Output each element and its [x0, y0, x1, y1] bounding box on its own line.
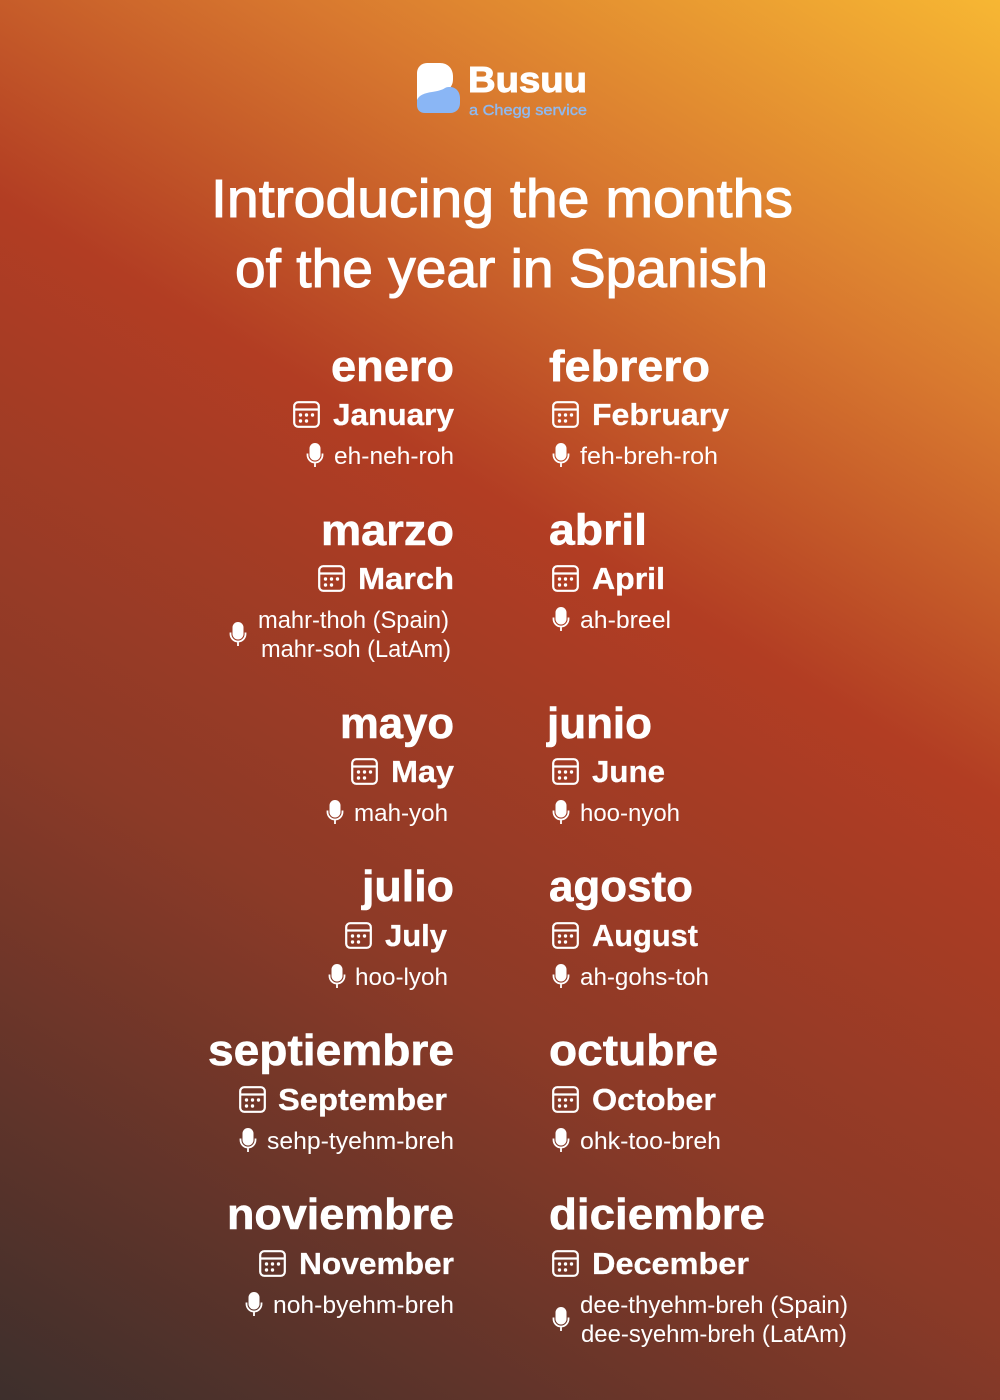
month: abril: [549, 506, 671, 634]
month: septiembre: [208, 1026, 454, 1155]
title: of the year in Spanish: [235, 239, 768, 299]
month: mayo: mayo: [340, 699, 454, 748]
month: febrero: February: [592, 397, 730, 432]
month: junio: junio: [546, 699, 652, 748]
month: noviembre: [227, 1190, 454, 1319]
month: febrero: feh-breh-roh: [580, 443, 718, 470]
month: enero: January: [333, 397, 455, 432]
month: enero: [294, 342, 455, 470]
logo wordmark: Busuu: [468, 59, 587, 100]
month: mayo: mah-yoh: [354, 800, 448, 827]
month: mayo: May: [391, 754, 455, 789]
month: mayo: [328, 699, 455, 827]
month: diciembre: December: [592, 1246, 749, 1281]
title: Introducing the months: [211, 169, 793, 229]
month: agosto: August: [592, 918, 698, 953]
month: agosto: ah-gohs-toh: [580, 964, 709, 991]
month: octubre: octubre: [549, 1026, 718, 1075]
month: septiembre: septiembre: [208, 1026, 454, 1075]
month: octubre: October: [592, 1082, 716, 1117]
month: enero: eh-neh-roh: [334, 443, 454, 470]
month: julio: hoo-lyoh: [355, 964, 448, 991]
month: marzo: March: [358, 561, 454, 596]
month: diciembre: dee-thyehm-breh (Spain): [580, 1292, 848, 1319]
icon: Busuu logo mark: [417, 63, 460, 113]
month: diciembre: [549, 1190, 848, 1348]
month: febrero: febrero: [549, 342, 710, 391]
month: julio: [330, 862, 454, 991]
month: septiembre: September: [278, 1082, 447, 1117]
month: enero: enero: [331, 342, 454, 391]
month: julio: julio: [361, 862, 454, 911]
month: abril: abril: [549, 506, 647, 554]
month: marzo: mahr-soh (LatAm): [261, 636, 451, 663]
month: septiembre: sehp-tyehm-breh: [267, 1128, 454, 1155]
month: noviembre: noviembre: [227, 1190, 454, 1239]
month: noviembre: noh-byehm-breh: [273, 1292, 454, 1319]
month: julio: July: [385, 918, 448, 953]
month: agosto: agosto: [549, 862, 693, 911]
month: marzo: [230, 506, 454, 663]
month: febrero: [549, 342, 730, 470]
logo tagline: a Chegg service: [469, 102, 587, 119]
month: marzo: mahr-thoh (Spain): [258, 607, 449, 634]
month: agosto: [549, 862, 709, 991]
month: junio: hoo-nyoh: [580, 800, 680, 827]
month: junio: June: [592, 754, 665, 789]
logo: [417, 59, 587, 119]
month: diciembre: dee-syehm-breh (LatAm): [581, 1321, 847, 1348]
month: abril: April: [592, 561, 665, 596]
month: junio: [546, 699, 680, 827]
title: [211, 169, 793, 299]
month: noviembre: November: [299, 1246, 454, 1281]
month: abril: ah-breel: [580, 607, 671, 634]
month: octubre: [549, 1026, 721, 1155]
month: marzo: marzo: [321, 506, 454, 555]
month: octubre: ohk-too-breh: [580, 1128, 721, 1155]
month: diciembre: diciembre: [549, 1190, 765, 1239]
